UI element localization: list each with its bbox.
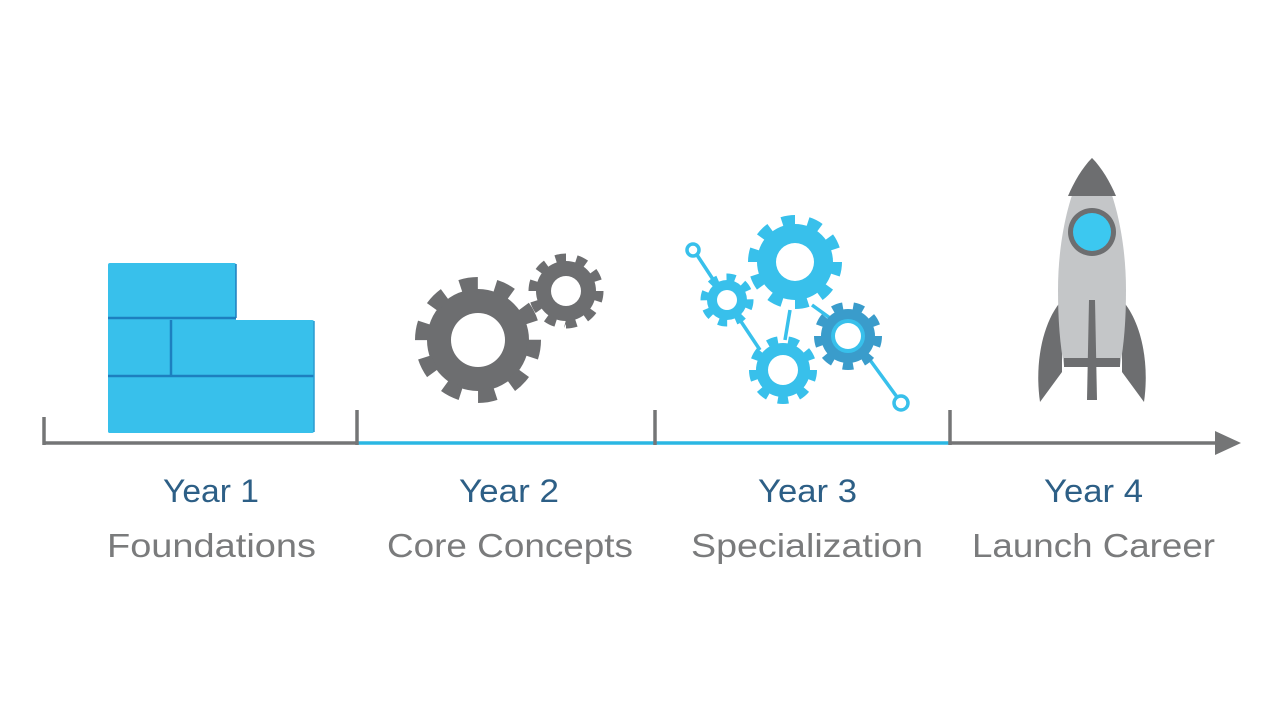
label: year 3: Specialization bbox=[691, 527, 923, 564]
label: year 3 bbox=[691, 473, 923, 564]
timeline bbox=[44, 410, 1241, 455]
icon: rocket bbox=[1038, 158, 1146, 402]
label: year 1: Year 1 bbox=[163, 473, 259, 509]
label: year 4: Launch Career bbox=[972, 527, 1215, 564]
label: year 2 bbox=[387, 473, 633, 564]
label: year 4 bbox=[972, 473, 1215, 564]
icon: bricks bbox=[108, 263, 314, 433]
label: year 1: Foundations bbox=[107, 527, 316, 564]
icon: gray gears bbox=[422, 258, 599, 396]
label: year 3: Year 3 bbox=[758, 473, 857, 509]
label: year 2: Year 2 bbox=[459, 473, 559, 509]
label: year 2: Core Concepts bbox=[387, 527, 633, 564]
label: year 1 bbox=[107, 473, 316, 564]
icon: blue gears network bbox=[687, 220, 908, 410]
label: year 4: Year 4 bbox=[1044, 473, 1143, 509]
